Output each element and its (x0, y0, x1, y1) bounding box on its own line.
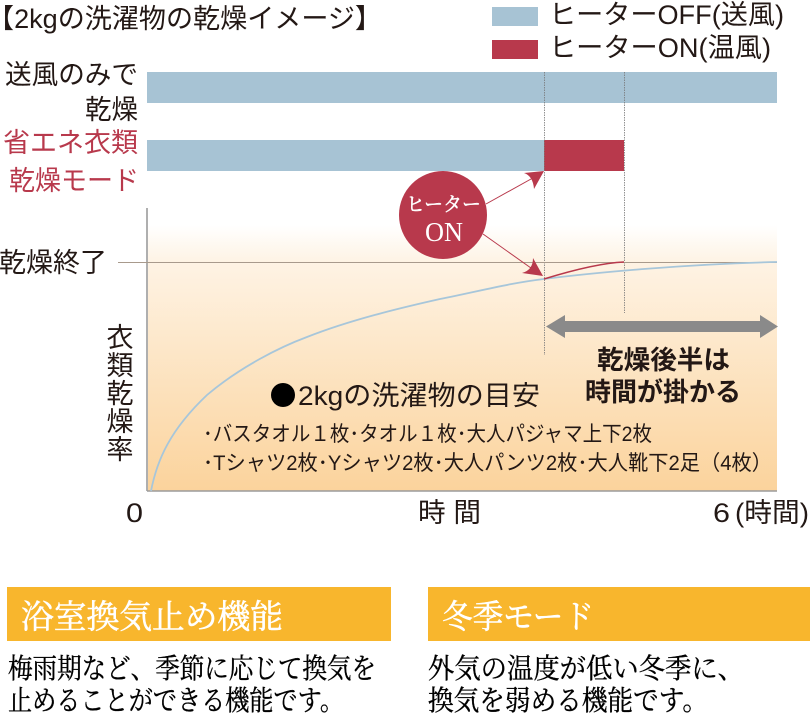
x axis labels: 0 (126, 498, 143, 528)
label: energy saving drying mode (3, 128, 139, 196)
guide lines (544, 72, 624, 355)
drying end line (118, 262, 777, 264)
laundry list: ･バスタオル１枚･タオル１枚･大人パジャマ上下2枚 (203, 423, 652, 446)
y axis label (106, 323, 134, 465)
laundry list (203, 423, 772, 475)
double arrow: latter half (546, 315, 778, 338)
curve: heater on (544, 262, 624, 279)
heater on badge (399, 171, 487, 259)
label: fan only drying (5, 60, 138, 125)
panel: winter mode: 外気の温度が低い冬季に、 (428, 653, 744, 685)
label: fan only drying: 乾燥 (85, 95, 138, 125)
legend (492, 0, 784, 63)
y axis label: 乾 (106, 379, 134, 409)
callout: latter half takes time (585, 345, 741, 407)
label: drying end: 乾燥終了 (0, 248, 107, 278)
label: energy saving drying mode: 省エネ衣類 (3, 128, 138, 158)
y axis label: 燥 (106, 407, 134, 437)
legend: ヒーターOFF(送風) (549, 0, 784, 30)
laundry list: ･Tシャツ2枚･Yシャツ2枚･大人パンツ2枚･大人靴下2足（4枚） (203, 452, 772, 475)
label: energy saving drying mode: 乾燥モード (9, 166, 139, 196)
bar: energy saving mode (147, 140, 624, 171)
curve: heater off (151, 262, 777, 491)
panel: winter mode: 冬季モード (442, 599, 594, 636)
panel: bathroom ventilation stop: 梅雨期など、季節に応じて換気を (8, 653, 376, 685)
heater on badge: ヒーター (406, 194, 481, 216)
legend: ヒーターON(温風) (549, 33, 771, 63)
x axis labels: 6 (713, 498, 730, 528)
chart axes (147, 208, 777, 491)
callout: latter half takes time: 時間が掛かる (585, 377, 741, 407)
y axis label: 類 (106, 351, 134, 381)
y axis label: 率 (106, 435, 134, 465)
panel: winter mode (428, 587, 810, 713)
panel: bathroom ventilation stop: 浴室換気止め機能 (21, 599, 283, 636)
x axis labels: (時間) (735, 498, 809, 528)
label: fan only drying: 送風のみで (5, 60, 138, 90)
x axis labels: 時 間 (418, 498, 481, 528)
y axis label: 衣 (106, 323, 134, 353)
heater on badge: ON (425, 217, 463, 247)
laundry heading: 2kgの洗濯物の目安 (298, 381, 540, 411)
chart area background (148, 225, 777, 491)
x axis labels (126, 498, 809, 528)
panel: bathroom ventilation stop (7, 587, 391, 713)
callout: latter half takes time: 乾燥後半は (597, 345, 730, 375)
bar: fan only (147, 72, 777, 103)
heater on arrows (483, 171, 544, 276)
